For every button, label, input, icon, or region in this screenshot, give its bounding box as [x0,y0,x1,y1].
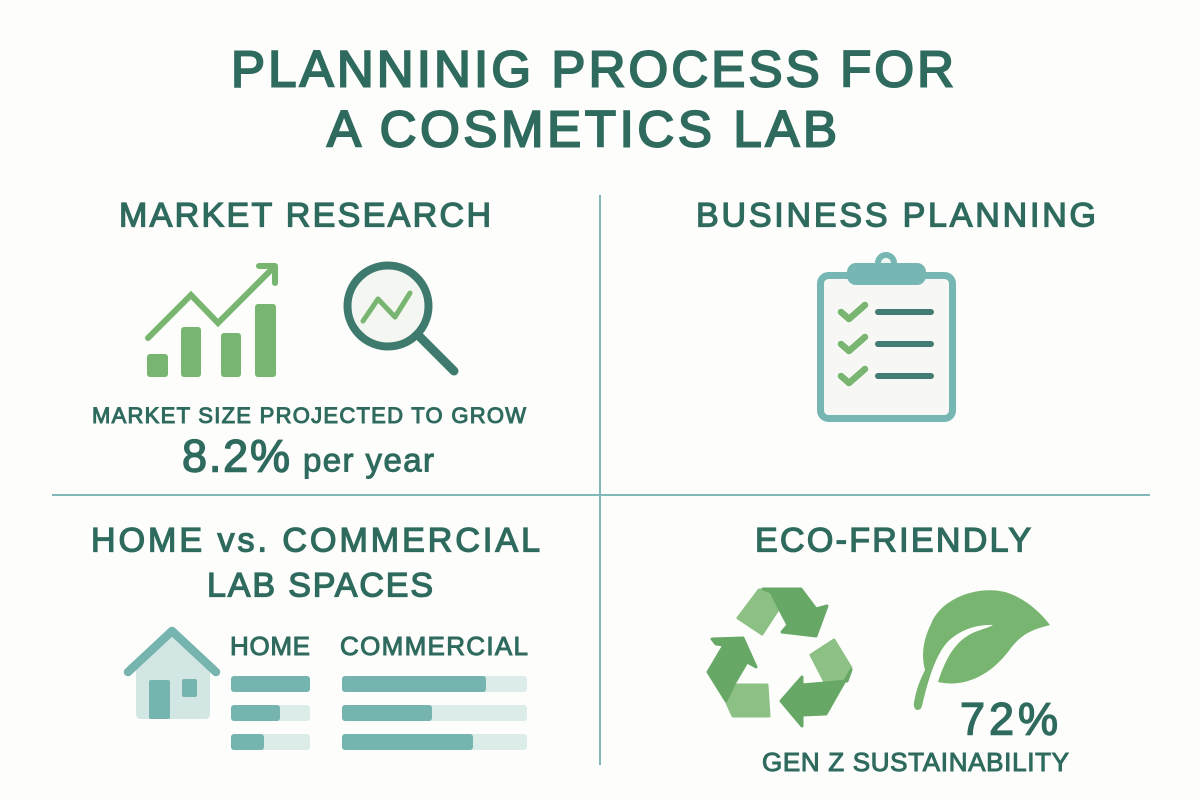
title: PLANNINIG PROCESS FOR [231,40,954,98]
heading: home vs commercial: LAB SPACES [207,566,433,604]
icon: leaf [914,590,1050,710]
bars: commercial [342,676,527,750]
icon: clipboard checklist [820,255,952,418]
stat: growth rate [182,430,434,482]
stat: growth rate: 8.2% [182,430,290,482]
panel: business planning [696,196,1096,418]
panel: home vs commercial lab spaces [91,522,540,750]
stat: growth rate: per year [303,442,434,478]
label: commercial: COMMERCIAL [340,631,528,661]
text: market size projection: MARKET SIZE PROJECTED TO GROW [92,403,526,428]
icon: magnifying glass [348,266,454,371]
icon: recycling arrows [708,589,851,726]
stat: 72%: 72% [960,694,1058,744]
icon: growth bar chart [147,266,276,377]
title [231,40,954,158]
panel: market research [92,196,526,482]
title: A COSMETICS LAB [327,100,837,158]
heading: eco-friendly: ECO-FRIENDLY [755,522,1031,560]
heading: home vs commercial [91,522,540,604]
heading: home vs commercial: HOME vs. COMMERCIAL [91,522,540,560]
heading: market research: MARKET RESEARCH [119,196,491,234]
label: home: HOME [230,631,310,661]
label: gen z sustainability: GEN Z SUSTAINABILITY [762,747,1069,777]
panel: eco-friendly [708,522,1069,777]
bars: home [231,676,310,750]
icon: house [128,631,216,719]
heading: business planning: BUSINESS PLANNING [696,196,1096,234]
